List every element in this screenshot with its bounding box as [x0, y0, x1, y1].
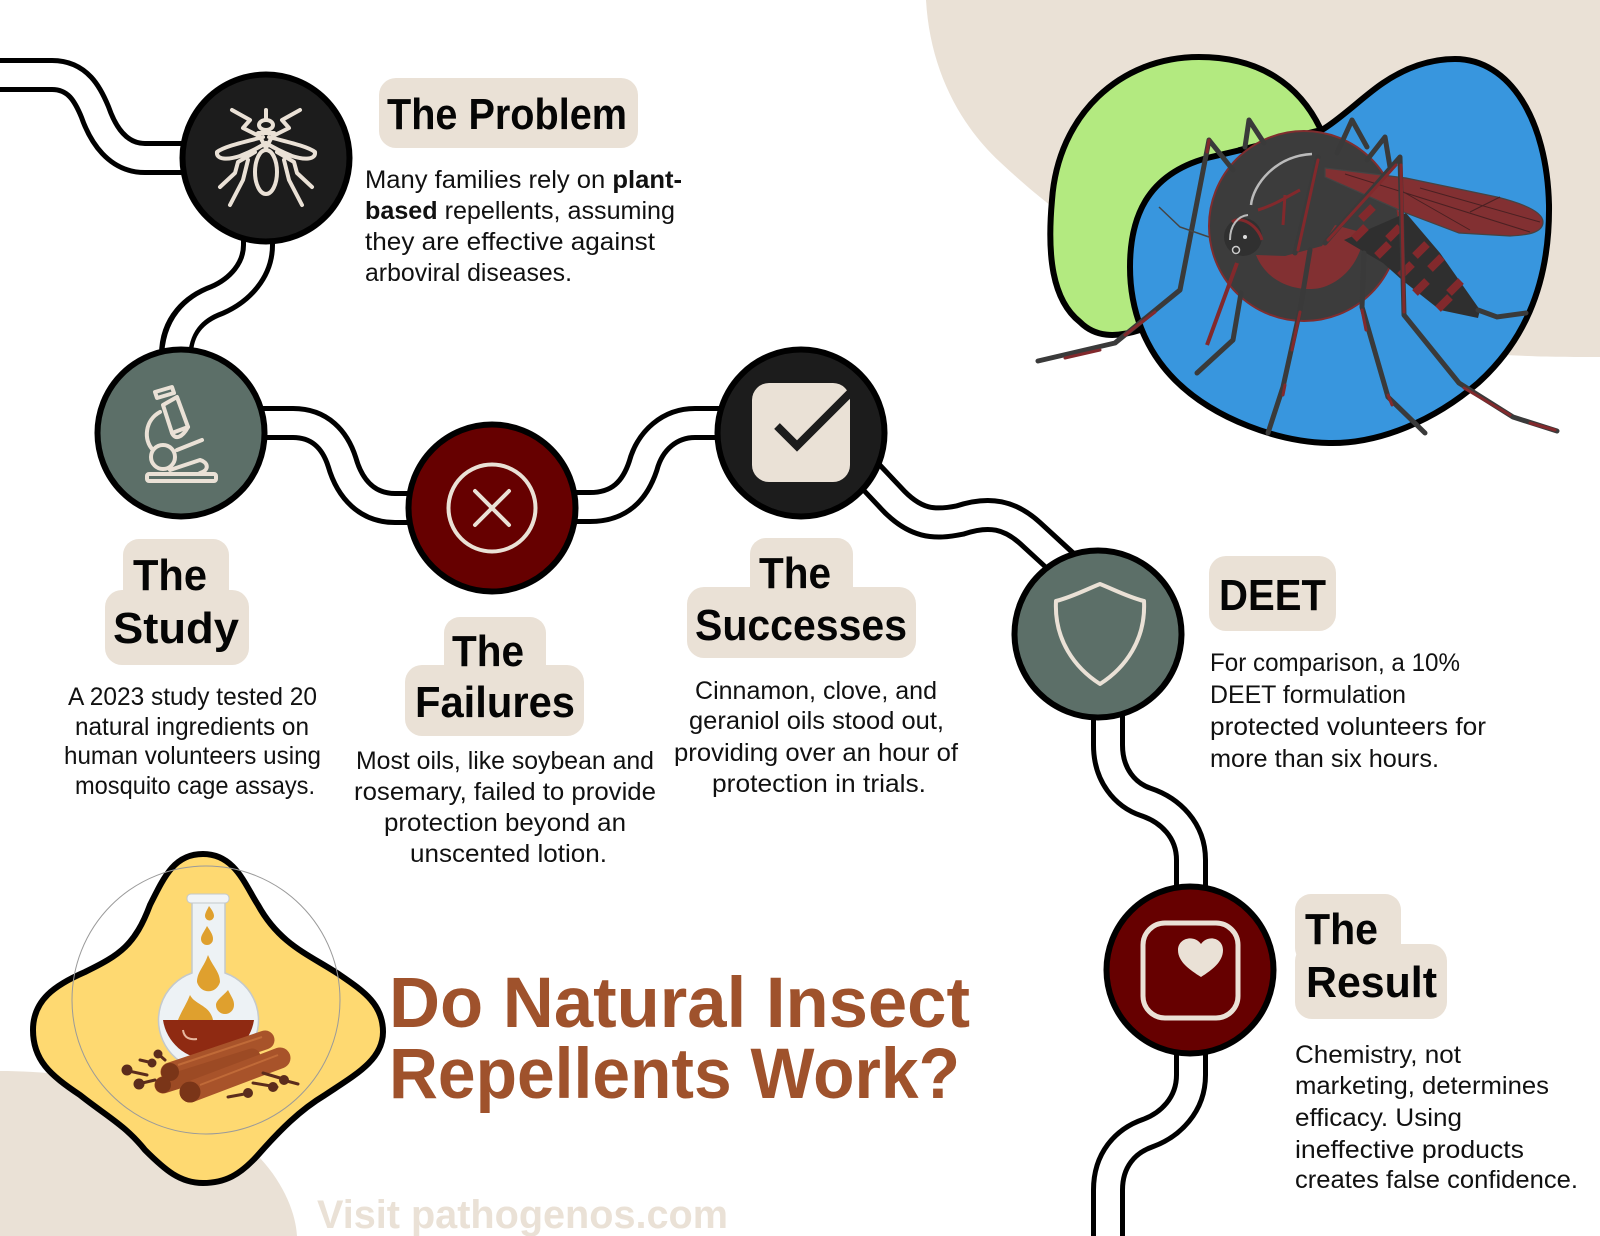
heading: DEET: DEET: [1219, 571, 1326, 620]
text: the problem: they are effective against: [365, 228, 655, 256]
step node: the successes (check icon): [718, 350, 884, 516]
heading: the successes: Successes: [695, 601, 907, 650]
heading: the study: The: [133, 551, 207, 600]
text: the result: efficacy. Using: [1295, 1104, 1462, 1132]
heading: the result: [1295, 894, 1447, 1019]
step node: the failures (x icon): [408, 424, 576, 592]
footer link text: Visit pathogenos.com: [317, 1193, 728, 1236]
heading: DEET: [1209, 556, 1336, 631]
text: the study: human volunteers using: [64, 742, 321, 770]
text: DEET: [1210, 649, 1486, 773]
text: DEET: DEET formulation: [1210, 681, 1406, 709]
text: the successes: protection in trials.: [712, 770, 926, 798]
text: the failures: unscented lotion.: [410, 840, 607, 868]
heading: the failures: The: [452, 627, 524, 676]
text: the study: mosquito cage assays.: [75, 772, 315, 800]
title: Do Natural Insect: [389, 964, 970, 1043]
title: [389, 964, 970, 1114]
icon: shield: [1056, 584, 1144, 684]
background shape: top right: [926, 0, 1600, 357]
text: the successes: geraniol oils stood out,: [689, 707, 944, 735]
text: the problem: [365, 166, 682, 287]
text: the result: ineffective products: [1295, 1136, 1524, 1164]
title: Repellents Work?: [389, 1035, 960, 1114]
heading: the study: [105, 539, 249, 665]
cloves: [123, 1051, 298, 1097]
text: the failures: Most oils, like soybean and: [356, 747, 654, 775]
text: the study: A 2023 study tested 20: [68, 683, 317, 711]
heading: the problem: [379, 78, 638, 148]
background shape: bottom left: [0, 1071, 297, 1236]
text: the problem: Many families rely on plant-: [365, 166, 682, 194]
text: DEET: For comparison, a 10%: [1210, 649, 1460, 677]
icon: cross in circle: [448, 464, 536, 552]
yellow blob: [33, 854, 383, 1183]
text: the failures: protection beyond an: [384, 809, 626, 837]
mosquito: [1038, 120, 1557, 433]
text: DEET: protected volunteers for: [1210, 713, 1486, 741]
icon: mosquito outline: [217, 110, 315, 205]
text: the result: Chemistry, not: [1295, 1041, 1461, 1069]
flask: [159, 894, 258, 1070]
step node: the study (microscope icon): [98, 350, 264, 516]
text: the result: [1295, 1041, 1578, 1194]
text: the successes: [674, 677, 958, 798]
text: the successes: providing over an hour of: [674, 739, 958, 767]
text: the study: [64, 683, 321, 800]
heading: the result: The: [1305, 905, 1378, 954]
text: the problem: based repellents, assuming: [365, 197, 675, 225]
text: the successes: Cinnamon, clove, and: [695, 677, 937, 705]
text: the failures: [354, 747, 656, 868]
heading: the result: Result: [1306, 958, 1437, 1007]
heading: the failures: Failures: [415, 678, 575, 727]
text: the result: marketing, determines: [1295, 1072, 1549, 1100]
icon: microscope: [147, 387, 216, 481]
step node: the problem (mosquito icon): [182, 74, 350, 242]
text: the failures: rosemary, failed to provide: [354, 778, 656, 806]
heading: the successes: The: [759, 549, 831, 598]
text: DEET: more than six hours.: [1210, 745, 1439, 773]
icon: mosquito illustration on colored blobs: [1038, 57, 1557, 443]
blue blob: [1130, 59, 1549, 443]
text: the result: creates false confidence.: [1295, 1166, 1578, 1194]
text: the problem: arboviral diseases.: [365, 259, 572, 287]
icon: heart in rounded square: [1143, 923, 1238, 1018]
illustration: flask with cinnamon and cloves on yellow blob: [33, 854, 383, 1183]
step node: the result (heart icon): [1106, 886, 1274, 1054]
winding path connecting the steps: [0, 75, 1191, 1236]
text: the study: natural ingredients on: [75, 713, 309, 741]
heading: the study: Study: [113, 604, 240, 653]
icon: checkbox: [752, 383, 852, 482]
heading: the successes: [687, 538, 916, 658]
heading: the failures: [405, 617, 584, 736]
cinnamon sticks: [155, 1037, 280, 1102]
step node: DEET (shield icon): [1014, 550, 1182, 718]
green blob: [1050, 57, 1321, 335]
heading: the problem: The Problem: [387, 90, 627, 139]
